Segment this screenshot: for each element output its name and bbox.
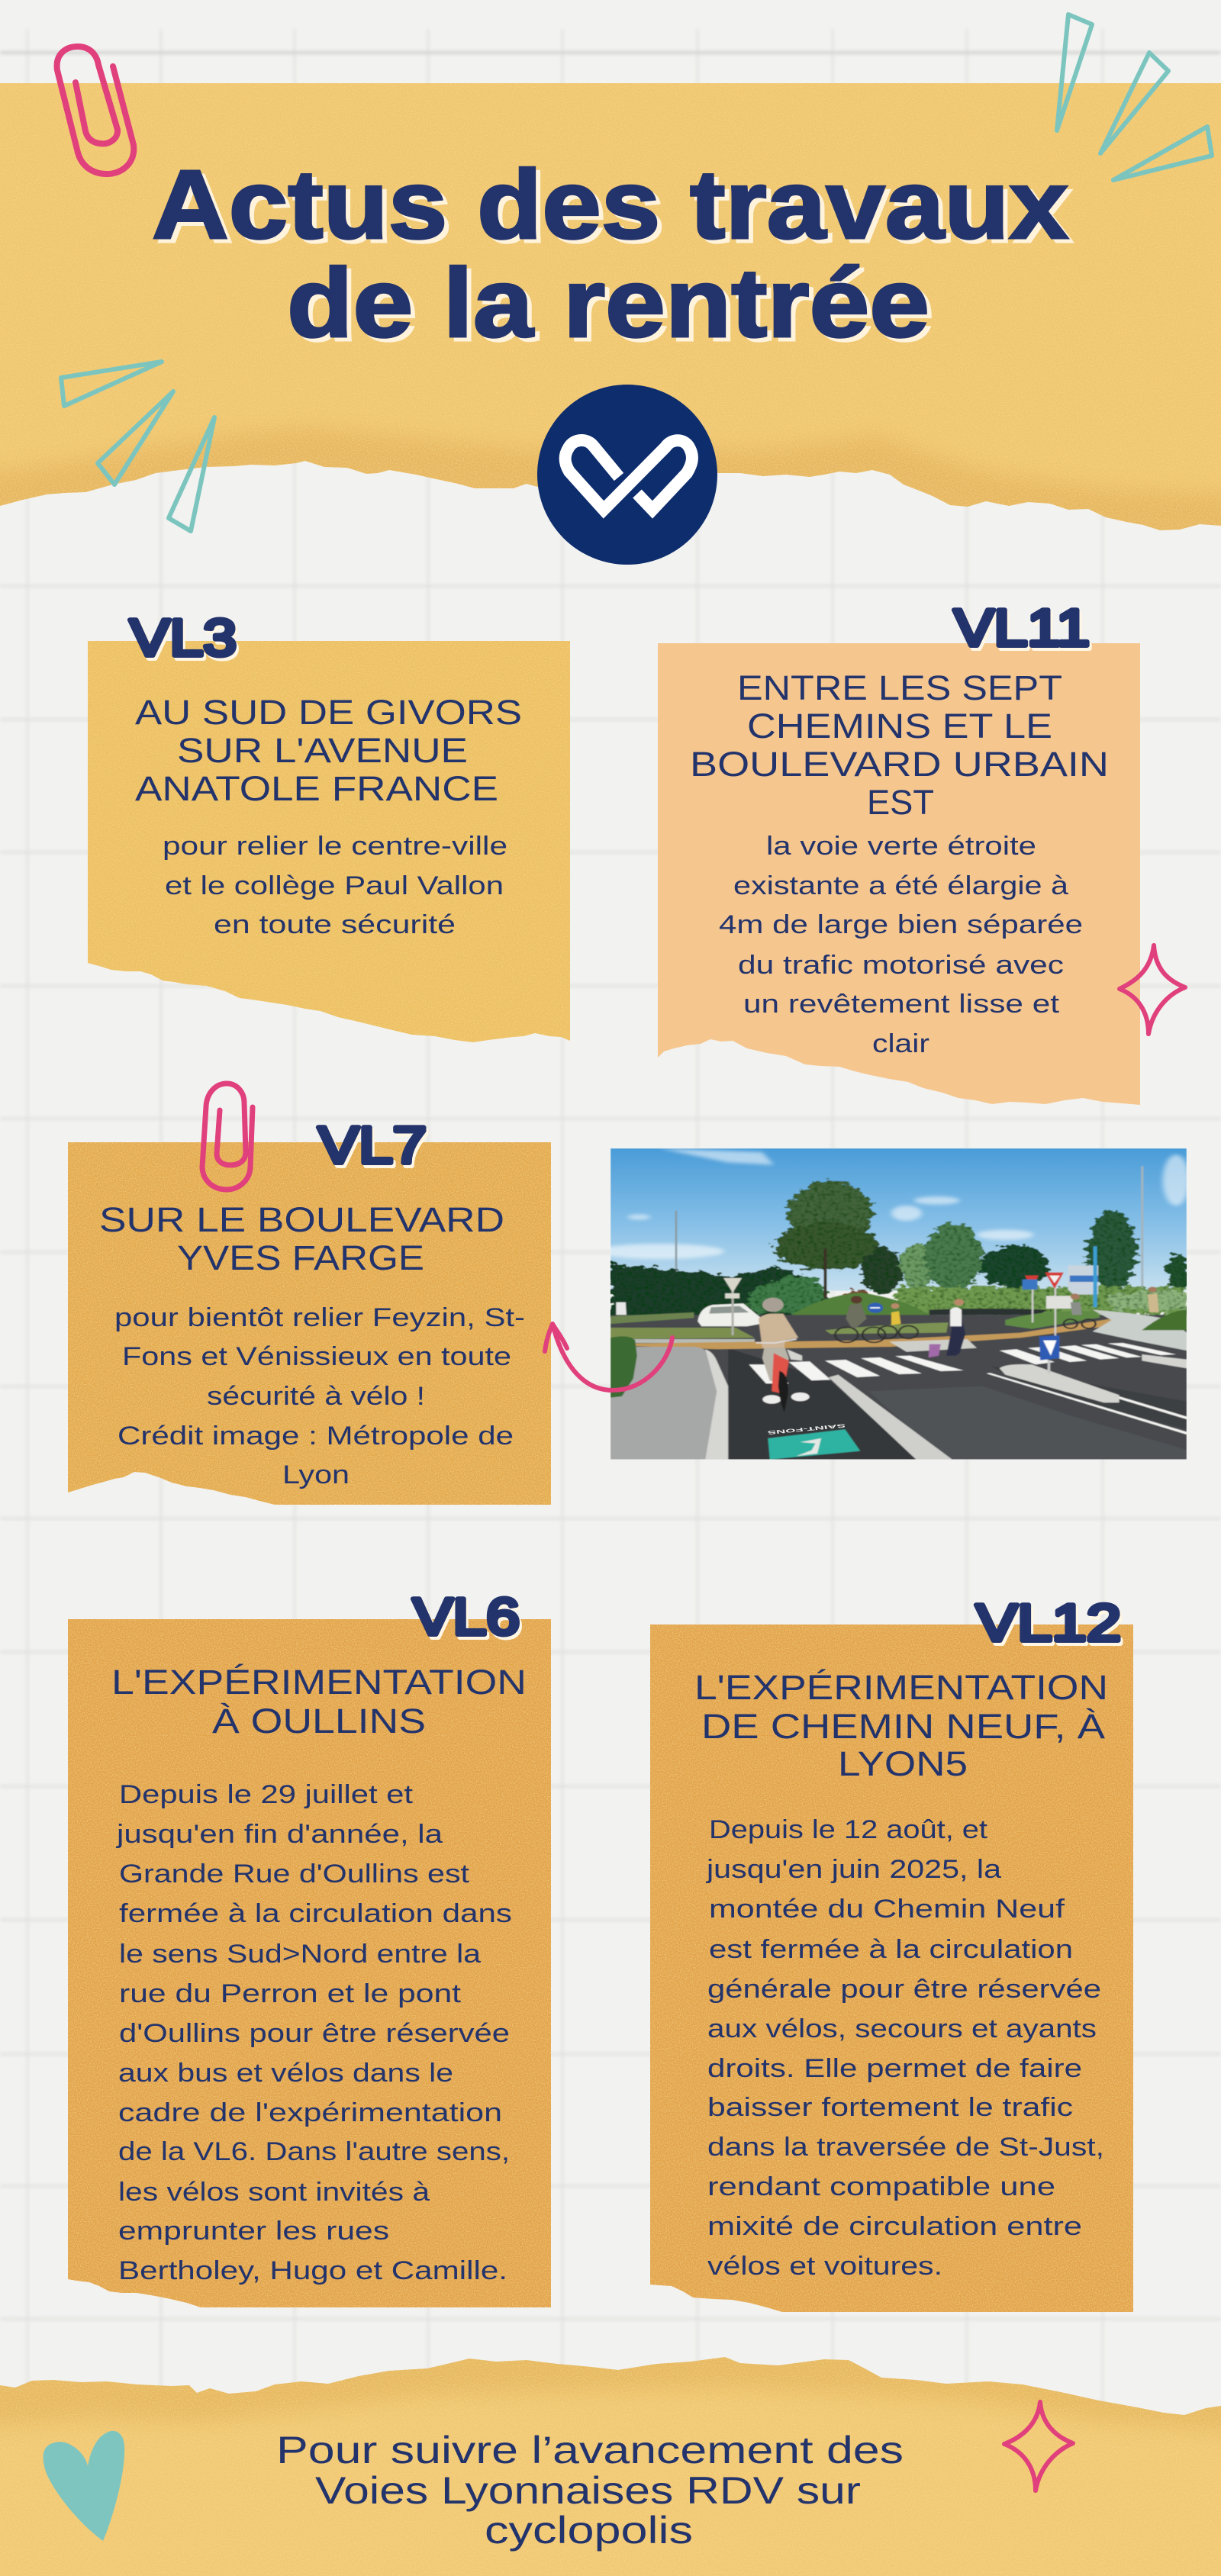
body text: de la VL6. Dans l'autre sens, [118,2137,510,2166]
body text: Fons et Vénissieux en toute [122,1342,511,1371]
card background [88,641,570,1042]
body text: clair [872,1029,929,1058]
heading: LYON5 [838,1744,968,1783]
body text: les vélos sont invités à [118,2178,430,2207]
heading: EST [867,783,934,822]
footer text [276,2429,904,2552]
photo: roundabout with cyclists [595,1148,1189,1460]
body text: du trafic motorisé avec [738,951,1064,980]
icon: teal sparks left [61,362,214,531]
body text: cadre de l'expérimentation [118,2098,502,2127]
heading [135,693,522,808]
body text: vélos et voitures. [707,2252,942,2281]
body text: 4m de large bien séparée [719,910,1083,939]
heading: À OULLINS [212,1702,426,1740]
label VL7: VL7 [321,1119,429,1177]
title: de la rentrée [287,249,929,358]
panel: VL11 [658,599,1140,1105]
body text: d'Oullins pour être réservée [119,2019,510,2048]
label VL12: VL12 [978,1597,1123,1655]
label VL11: VL11 [956,602,1092,660]
body text [163,832,507,939]
label VL3: VL3 [130,609,237,667]
body text [114,1303,525,1489]
body text: jusqu'en juin 2025, la [706,1855,1001,1884]
heading [111,1663,527,1740]
heading [694,1668,1108,1783]
body text: et le collège Paul Vallon [165,871,504,900]
body text [116,1780,512,2285]
card background [68,1619,551,2307]
panel: top torn banner [0,83,1221,530]
body text: le sens Sud>Nord entre la [119,1940,481,1969]
body text: aux vélos, secours et ayants [707,2014,1097,2043]
card background [658,643,1140,1105]
body text: Crédit image : Métropole de [118,1422,514,1451]
arrow: pink curved arrow to text [545,1324,672,1390]
body text: sécurité à vélo ! [207,1382,425,1411]
body text: Grande Rue d'Oullins est [119,1860,470,1889]
heading: ENTRE LES SEPT [737,668,1062,707]
footer text: Pour suivre l’avancement des [276,2429,904,2471]
label VL7: VL7 [318,1116,427,1174]
icon: round logo [537,385,717,565]
body text: droits. Elle permet de faire [707,2054,1082,2083]
panel: footer torn banner [0,2350,1221,2576]
heading [690,668,1109,822]
icon: teal sparks top right [1057,14,1212,180]
label VL12: VL12 [976,1594,1121,1652]
footer text: Voies Lyonnaises RDV sur [315,2469,861,2512]
label VL6: VL6 [413,1588,520,1646]
heading: AU SUD DE GIVORS [135,693,522,732]
heading: L'EXPÉRIMENTATION [111,1663,527,1702]
body text: en toute sécurité [214,910,456,939]
body text: un revêtement lisse et [743,990,1060,1019]
icon: pink paperclip top [57,47,134,174]
heading: DE CHEMIN NEUF, À [701,1707,1105,1746]
body text: est fermée à la circulation [709,1935,1073,1964]
card background [650,1624,1133,2312]
body text: pour bientôt relier Feyzin, St- [114,1303,525,1332]
heading: CHEMINS ET LE [747,707,1052,745]
body text [706,1815,1104,2281]
footer text: cyclopolis [485,2509,693,2552]
body text: Depuis le 12 août, et [709,1815,988,1844]
body text: fermée à la circulation dans [119,1899,512,1928]
title: de la rentrée [292,253,934,362]
body text: Depuis le 29 juillet et [119,1780,414,1809]
heading: SUR L'AVENUE [177,731,468,770]
label VL6: VL6 [415,1591,522,1649]
panel: VL6 [68,1588,551,2307]
title: Actus des travaux [152,150,1068,259]
body text: mixité de circulation entre [707,2212,1082,2241]
label VL3: VL3 [132,612,239,670]
body text: emprunter les rues [118,2217,389,2246]
heading: SUR LE BOULEVARD [99,1200,504,1239]
body text: pour relier le centre-ville [163,832,507,861]
body text: rendant compatible une [707,2172,1055,2201]
icon: pink star footer [1004,2402,1073,2491]
body text [719,832,1083,1058]
icon: pink star right [1120,945,1185,1034]
panel: VL3 [88,609,570,1042]
body text: dans la traversée de St-Just, [707,2133,1104,2162]
heading: ANATOLE FRANCE [135,769,498,808]
title: Actus des travaux [156,154,1073,263]
card background [68,1142,551,1505]
heading: YVES FARGE [177,1238,424,1277]
photo: roundabout with cyclists: SAINT-FONS [766,1422,846,1436]
body text: Lyon [282,1460,350,1489]
body text: montée du Chemin Neuf [709,1895,1065,1924]
body text: Bertholey, Hugo et Camille. [118,2256,507,2285]
panel: VL12 [650,1594,1133,2312]
icon: pink paperclip VL7 [202,1084,253,1190]
label VL11: VL11 [954,599,1090,657]
body text: rue du Perron et le pont [119,1979,462,2008]
icon: teal heart [43,2431,124,2541]
body text: baisser fortement le trafic [707,2093,1073,2122]
title [152,150,1073,362]
heading: L'EXPÉRIMENTATION [694,1668,1108,1707]
panel: VL7 [68,1116,551,1505]
body text: jusqu'en fin d'année, la [116,1820,443,1849]
heading: BOULEVARD URBAIN [690,745,1109,784]
heading [99,1200,504,1277]
body text: générale pour être réservée [707,1975,1101,2004]
body text: existante a été élargie à [733,871,1068,900]
body text: la voie verte étroite [766,832,1036,861]
body text: aux bus et vélos dans le [118,2059,453,2088]
